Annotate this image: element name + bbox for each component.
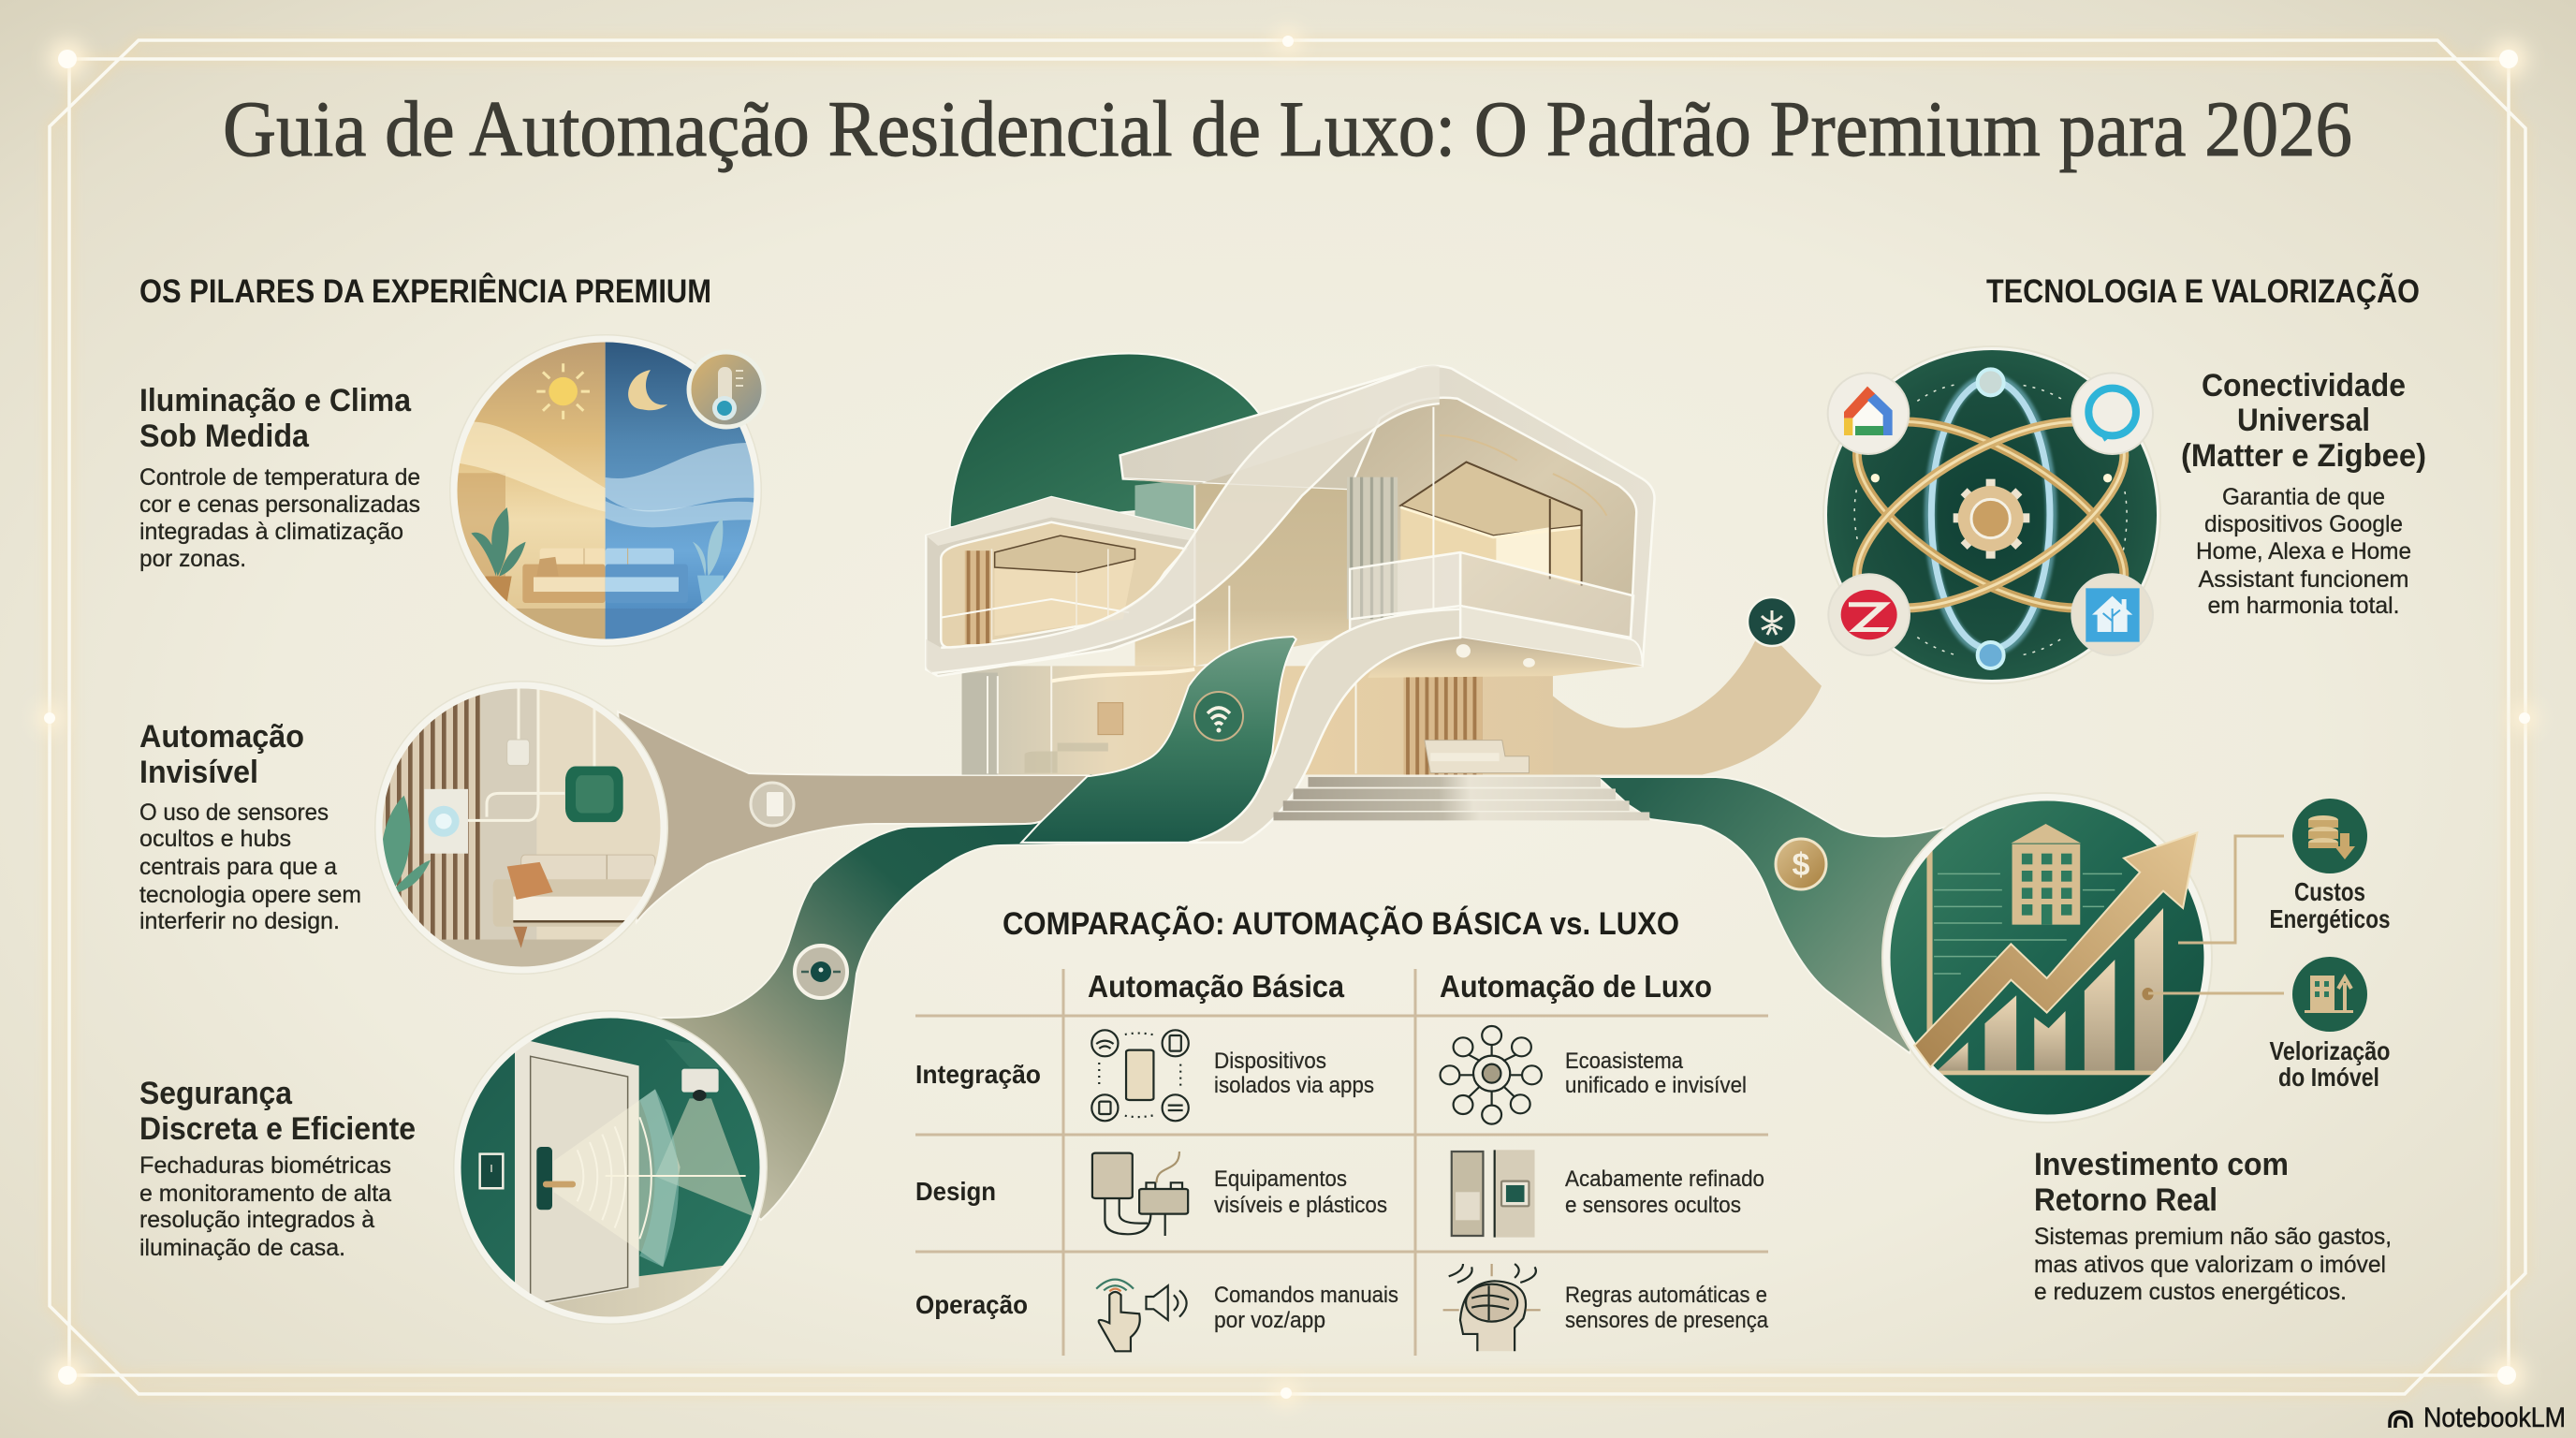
wall sensor xyxy=(424,789,468,854)
cell texts: visíveis e plásticos xyxy=(1214,1193,1387,1218)
text block: segurança xyxy=(139,1076,416,1261)
text block: investimento: Investimento com xyxy=(2034,1147,2289,1182)
moon xyxy=(628,370,667,410)
armchair xyxy=(1425,741,1529,773)
icon: alexa xyxy=(2071,373,2153,454)
row labels: Operação xyxy=(915,1290,1028,1319)
column headers: Automação Básica xyxy=(1088,969,1345,1004)
panel: automação invisível illustration xyxy=(374,680,671,980)
text block: iluminação: cor e cenas personalizadas xyxy=(139,492,420,518)
text block: investimento: Retorno Real xyxy=(2034,1182,2217,1218)
text block: conectividade: em harmonia total. xyxy=(2207,593,2400,619)
cell texts: isolados via apps xyxy=(1214,1073,1374,1098)
cell texts: Acabamente refinado xyxy=(1565,1167,1764,1192)
lower ribbon xyxy=(1189,609,1460,843)
sofa xyxy=(493,855,667,948)
connector: green ribbon to investment xyxy=(1598,777,1975,1053)
balcony floor slab xyxy=(1460,606,1643,666)
cell texts: Regras automáticas e xyxy=(1565,1283,1767,1308)
icon: home assistant xyxy=(2071,574,2153,655)
text block: conectividade xyxy=(2181,368,2426,619)
panel: investment chart illustration xyxy=(1882,793,2284,1123)
sofa xyxy=(522,549,688,603)
text block: segurança: e monitoramento de alta xyxy=(139,1181,391,1207)
text block: segurança: Fechaduras biométricas xyxy=(139,1152,391,1179)
connector: beige ribbon to hidden automation xyxy=(618,712,1088,922)
middle wall and glass xyxy=(1135,478,1350,666)
label: custos energéticos xyxy=(2269,877,2391,933)
connector: green ribbon to security xyxy=(646,636,1290,1220)
bars xyxy=(1938,908,2163,1070)
cell texts: Comandos manuais xyxy=(1214,1283,1398,1308)
text block: conectividade: Universal xyxy=(2237,403,2370,438)
ground floor walls xyxy=(962,666,1553,774)
text block: iluminação: integradas à climatização xyxy=(139,519,403,545)
gear xyxy=(1954,479,2029,559)
cell texts: sensores de presença xyxy=(1565,1308,1769,1333)
cell texts xyxy=(1214,1049,1769,1333)
lock and handle xyxy=(536,1147,552,1210)
scan beam xyxy=(554,1089,681,1267)
connector lines xyxy=(2148,836,2284,993)
icon: brain automation xyxy=(1443,1264,1541,1351)
text block: investimento: Sistemas premium não são gastos, xyxy=(2034,1224,2392,1250)
green ribbon upper part xyxy=(1021,637,1296,843)
cell texts: Ecoasistema xyxy=(1565,1049,1684,1074)
text block: automação invisível: Automação xyxy=(139,719,304,755)
column headers: Automação de Luxo xyxy=(1440,969,1712,1004)
text block: segurança: Discreta e Eficiente xyxy=(139,1111,416,1147)
row labels: Design xyxy=(915,1177,996,1206)
text block: iluminação: por zonas. xyxy=(139,546,246,572)
heading: tecnologia: TECNOLOGIA E VALORIZAÇÃO xyxy=(1986,273,2420,310)
icon: camera node xyxy=(795,946,847,998)
arrow xyxy=(1914,832,2197,1067)
text block: automação invisível: centrais para que a xyxy=(139,854,337,880)
text block: automação invisível: O uso de sensores xyxy=(139,800,329,826)
heading: comparação: COMPARAÇÃO: AUTOMAÇÃO BÁSICA vs. LUXO xyxy=(1003,906,1679,942)
upper box xyxy=(1120,366,1655,666)
beige band towards connectivity xyxy=(1500,626,1822,774)
cell texts: Equipamentos xyxy=(1214,1167,1347,1192)
icon: thermometer xyxy=(689,352,764,427)
text block: iluminação: Iluminação e Clima xyxy=(139,383,412,418)
text block: iluminação: Sob Medida xyxy=(139,418,310,454)
icon: zigbee xyxy=(1828,574,1910,655)
text block: automação invisível xyxy=(139,719,361,934)
text block: iluminação: Controle de temperatura de xyxy=(139,464,420,491)
icon: property value xyxy=(2292,957,2367,1032)
label: custos energéticos: Custos xyxy=(2294,877,2365,906)
cell texts: Dispositivos xyxy=(1214,1049,1326,1074)
panel: segurança illustration xyxy=(449,1008,774,1329)
column headers xyxy=(1088,969,1712,1004)
green hub xyxy=(565,766,623,822)
text block: automação invisível: ocultos e hubs xyxy=(139,826,291,852)
row labels: Integração xyxy=(915,1060,1041,1089)
label: valorização: Velorização xyxy=(2269,1036,2391,1065)
panel: iluminação illustration xyxy=(446,331,765,647)
icon: dollar coin xyxy=(1776,839,1826,889)
stairs xyxy=(1273,777,1649,820)
row labels xyxy=(915,1060,1041,1319)
text block: automação invisível: Invisível xyxy=(139,755,258,790)
text block: segurança: Segurança xyxy=(139,1076,293,1111)
green dome xyxy=(950,353,1260,527)
cell texts: e sensores ocultos xyxy=(1565,1193,1741,1218)
text block: investimento: mas ativos que valorizam o imóvel xyxy=(2034,1252,2386,1278)
orbit nodes xyxy=(1978,369,2004,395)
door xyxy=(515,1041,639,1306)
plants xyxy=(471,507,526,577)
text block: segurança: resolução integrados à xyxy=(139,1207,374,1233)
text block: investimento: e reduzem custos energéticos. xyxy=(2034,1279,2347,1305)
cell texts: por voz/app xyxy=(1214,1308,1325,1333)
panel: connectivity illustration xyxy=(1823,346,2160,683)
left box xyxy=(926,497,1194,676)
label: valorização xyxy=(2269,1036,2391,1092)
label: valorização: do Imóvel xyxy=(2278,1063,2379,1092)
icon: sensor node xyxy=(751,783,794,826)
sun xyxy=(536,363,590,419)
flowing ribbon upper xyxy=(926,365,1440,673)
icon: isolated devices xyxy=(1091,1030,1189,1121)
plant xyxy=(381,796,431,894)
air waves xyxy=(452,421,606,512)
icon: network node xyxy=(1748,597,1796,646)
icon: refined finish xyxy=(1452,1150,1535,1238)
wood slats lobby xyxy=(1404,663,1483,774)
cell texts: unificado e invisível xyxy=(1565,1073,1747,1098)
label: custos energéticos: Energéticos xyxy=(2269,904,2391,933)
heading: pilares: OS PILARES DA EXPERIÊNCIA PREMIUM xyxy=(139,272,711,310)
text block: iluminação xyxy=(139,383,420,572)
icon: wifi node xyxy=(1194,692,1243,741)
text block: conectividade: Garantia de que xyxy=(2222,484,2385,510)
panel: house xyxy=(926,353,1822,843)
text block: conectividade: dispositivos Google xyxy=(2204,511,2403,537)
text block: conectividade: Home, Alexa e Home xyxy=(2196,538,2411,565)
panel: comparison table xyxy=(915,969,1769,1356)
text block: segurança: iluminação de casa. xyxy=(139,1235,345,1261)
title: Guia de Automação Residencial de Luxo: O Padrão Premium para 2026 xyxy=(223,85,2352,173)
icon: unified ecosystem xyxy=(1441,1026,1542,1124)
icon: visible equipment xyxy=(1092,1152,1188,1236)
text block: investimento xyxy=(2034,1147,2392,1305)
icon: manual commands xyxy=(1096,1280,1187,1351)
balcony glass xyxy=(1350,552,1633,638)
icon: google home xyxy=(1828,373,1909,454)
text block: conectividade: (Matter e Zigbee) xyxy=(2181,438,2426,474)
room interior xyxy=(1400,506,1582,586)
text block: automação invisível: interferir no design. xyxy=(139,908,340,934)
wall switch xyxy=(480,1154,503,1188)
building xyxy=(2011,824,2081,925)
text block: automação invisível: tecnologia opere sem xyxy=(139,882,361,908)
icon: energy costs xyxy=(2292,799,2367,873)
icon: dollar coin: $ xyxy=(1793,847,1810,883)
camera light xyxy=(655,1098,755,1217)
text block: conectividade: Conectividade xyxy=(2202,368,2406,404)
orbits xyxy=(1829,379,2152,654)
text block: conectividade: Assistant funcionem xyxy=(2198,566,2409,593)
